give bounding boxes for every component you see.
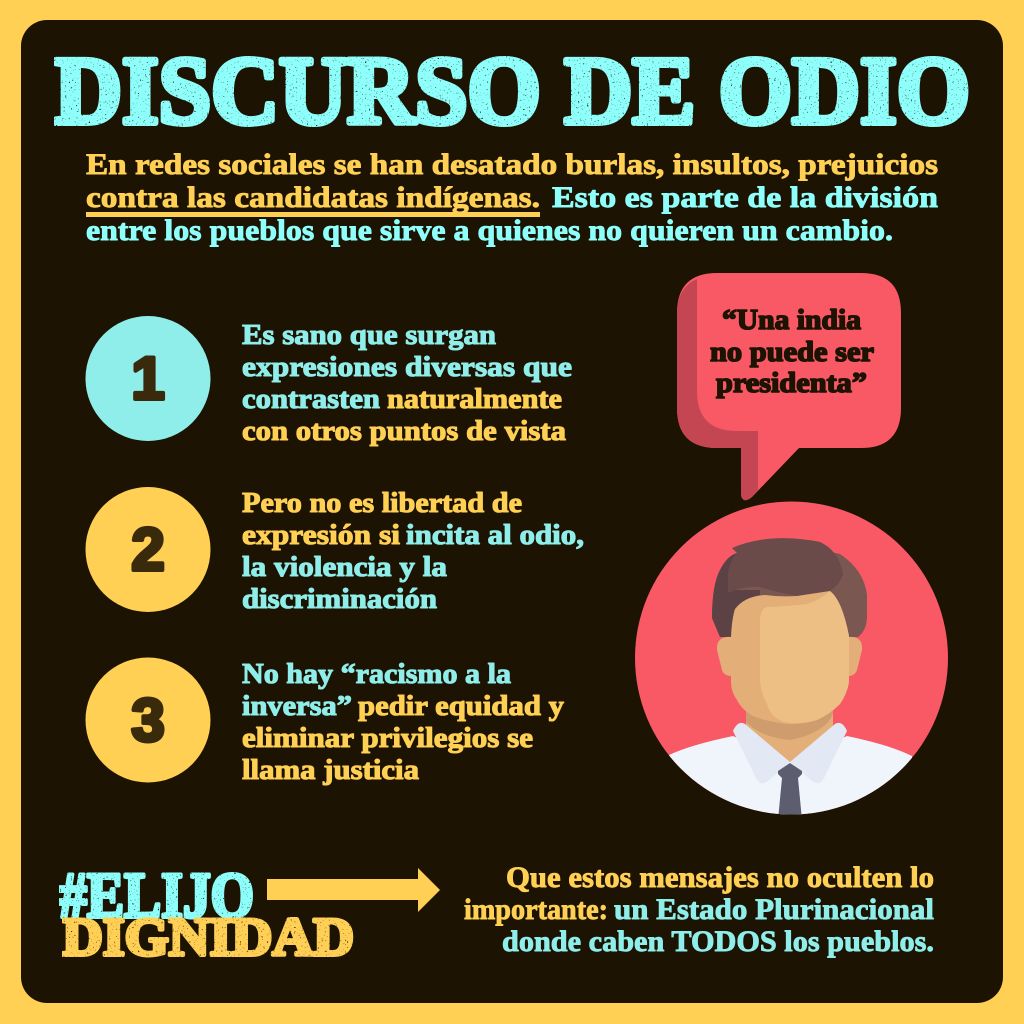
point 3 text bbox=[242, 658, 565, 786]
point 2 bbox=[86, 487, 584, 615]
ears bbox=[717, 637, 862, 676]
point 3 text: pedir equidad y bbox=[358, 690, 565, 722]
point 1 text: contrasten bbox=[242, 383, 380, 415]
intro text: En redes sociales se han desatado burlas, insultos, prejuicios bbox=[86, 148, 938, 181]
point 1 text: con otros puntos de vista bbox=[242, 415, 567, 447]
number badge 2 bbox=[86, 487, 210, 612]
point 2 text: la violencia y la bbox=[242, 551, 448, 583]
closing message: Que estos mensajes no oculten lo bbox=[506, 861, 934, 894]
hashtag: DIGNIDAD bbox=[62, 907, 354, 967]
quote text: no puede ser bbox=[710, 336, 874, 368]
quote text bbox=[710, 304, 874, 399]
number badge 3 bbox=[86, 658, 210, 782]
point 1 text: Es sano que surgan bbox=[242, 319, 496, 351]
quote text: “Una india bbox=[722, 304, 861, 336]
point 3 text: eliminar privilegios se bbox=[242, 722, 533, 754]
hashtag: #ELIJO bbox=[59, 860, 254, 932]
point 2 text: Pero no es libertad de bbox=[242, 487, 522, 519]
intro text bbox=[86, 148, 938, 247]
neck bbox=[746, 714, 833, 762]
number badge 1: 1 bbox=[131, 345, 165, 412]
number badge 3: 3 bbox=[131, 687, 165, 754]
title: DISCURSO DE ODIO bbox=[54, 37, 970, 144]
point 2 text: incita al odio, bbox=[406, 519, 584, 551]
point 3 text: No hay “racismo a la bbox=[242, 658, 512, 690]
point 1 text bbox=[242, 319, 572, 447]
face bbox=[731, 591, 849, 724]
point 3 bbox=[86, 658, 565, 786]
point 2 text bbox=[242, 487, 584, 615]
intro text: contra las candidatas indígenas. bbox=[86, 181, 540, 214]
speech bubble bbox=[677, 273, 901, 500]
point 3 text: inversa” bbox=[242, 690, 352, 722]
hair bbox=[712, 538, 867, 637]
point 1 bbox=[86, 316, 572, 447]
closing message bbox=[464, 861, 934, 958]
number badge 1 bbox=[86, 316, 210, 441]
point 1 text: expresiones diversas que bbox=[242, 351, 572, 383]
closing message: un Estado Plurinacional bbox=[614, 893, 934, 926]
point 1 text: naturalmente bbox=[387, 383, 562, 415]
point 2 text: discriminación bbox=[242, 583, 437, 615]
portrait of a man bbox=[635, 502, 948, 830]
shirt bbox=[669, 736, 912, 814]
point 2 text: expresión si bbox=[242, 519, 400, 551]
intro text: Esto es parte de la división bbox=[552, 181, 938, 214]
quote text: presidenta” bbox=[716, 367, 867, 399]
arrow bbox=[267, 868, 440, 912]
collar bbox=[733, 723, 847, 783]
hashtag bbox=[59, 860, 354, 967]
intro text: entre los pueblos que sirve a quienes no quieren un cambio. bbox=[86, 214, 893, 247]
closing message: donde caben TODOS los pueblos. bbox=[502, 925, 934, 958]
point 3 text: llama justicia bbox=[242, 754, 420, 786]
number badge 2: 2 bbox=[131, 516, 165, 583]
closing message: importante: bbox=[464, 893, 608, 926]
necktie bbox=[778, 763, 802, 820]
